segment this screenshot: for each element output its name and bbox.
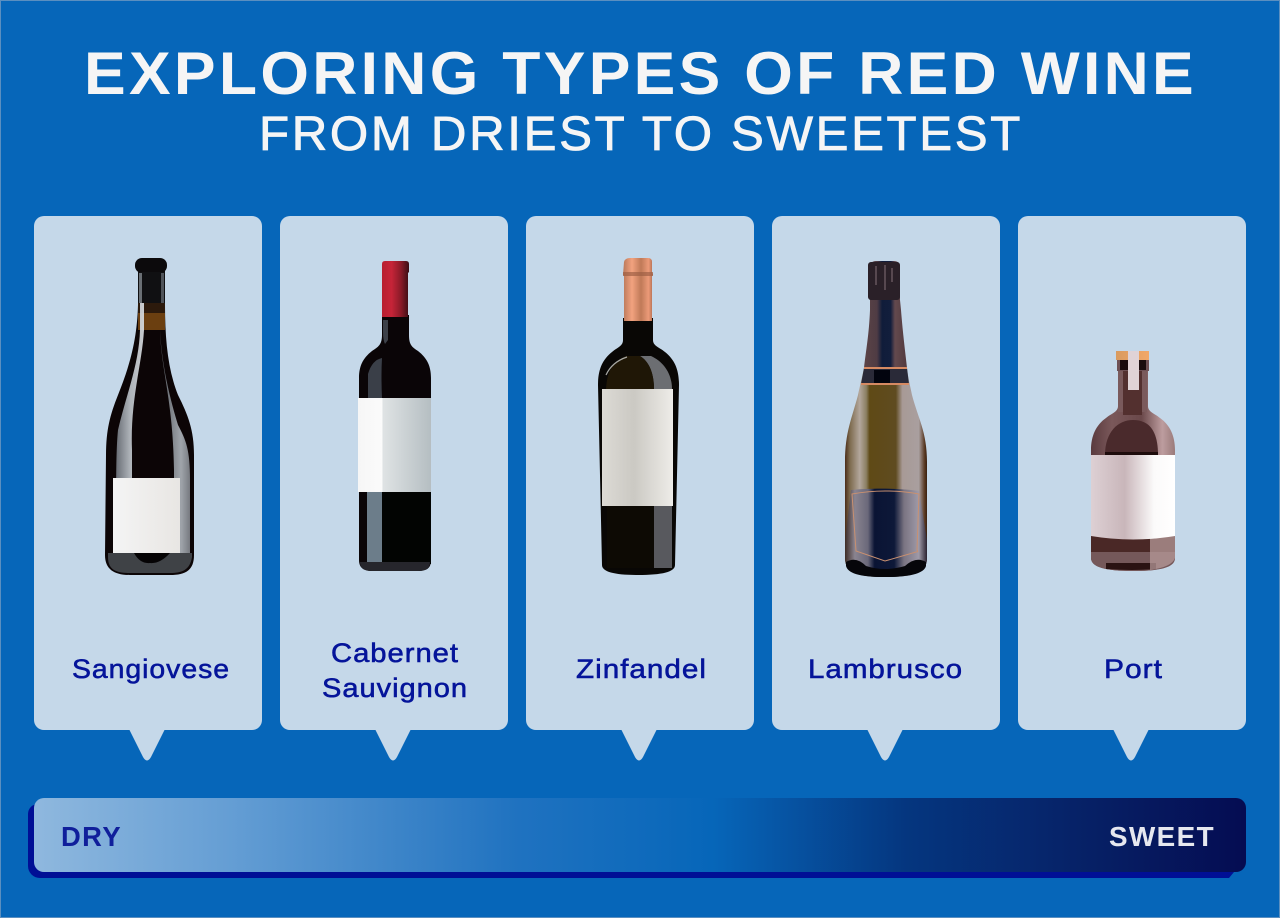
icon: Port bottle bbox=[1091, 351, 1175, 571]
panel: Port bbox=[1018, 216, 1246, 760]
name: Cabernet bbox=[331, 638, 459, 668]
cork bbox=[1116, 351, 1149, 360]
name: Port bbox=[1104, 654, 1163, 684]
card with pointer bbox=[772, 216, 1000, 760]
copper label outline bbox=[852, 491, 919, 561]
panel: Sangiovese bbox=[34, 216, 262, 760]
panel: Cabernet Sauvignon: Sauvignon bbox=[322, 673, 468, 703]
copper bands bbox=[861, 368, 909, 384]
icon: Cabernet bottle bbox=[358, 261, 431, 571]
card with pointer bbox=[526, 216, 754, 760]
card with pointer bbox=[34, 216, 262, 760]
card with pointer bbox=[280, 216, 508, 760]
dry label: DRY bbox=[61, 821, 122, 852]
blank label bbox=[1091, 455, 1175, 540]
name: Zinfandel bbox=[576, 654, 707, 684]
copper capsule bbox=[623, 258, 653, 321]
panel: Lambrusco bbox=[772, 216, 1000, 760]
icon: Sangiovese bottle bbox=[105, 258, 194, 575]
card with pointer bbox=[1018, 216, 1246, 760]
bar shadow bbox=[28, 804, 1239, 878]
subtitle: FROM DRIEST TO SWEETEST bbox=[259, 107, 1023, 161]
icon: Zinfandel bottle bbox=[598, 258, 679, 575]
red capsule bbox=[382, 261, 409, 317]
foil neck bbox=[864, 261, 907, 368]
title: EXPLORING TYPES OF RED WINE bbox=[84, 39, 1197, 107]
gradient bar bbox=[34, 798, 1246, 872]
seal strip bbox=[1128, 351, 1139, 390]
blank label bbox=[602, 389, 673, 506]
name: Lambrusco bbox=[808, 654, 963, 684]
blank label bbox=[113, 478, 180, 553]
icon: Lambrusco bottle bbox=[845, 261, 927, 577]
dry to sweet scale bbox=[28, 798, 1246, 878]
blank label bbox=[358, 398, 431, 492]
panel: Zinfandel bbox=[526, 216, 754, 760]
name: Sangiovese bbox=[72, 654, 230, 684]
panel: Cabernet Sauvignon bbox=[280, 216, 508, 760]
sweet label: SWEET bbox=[1109, 821, 1215, 852]
